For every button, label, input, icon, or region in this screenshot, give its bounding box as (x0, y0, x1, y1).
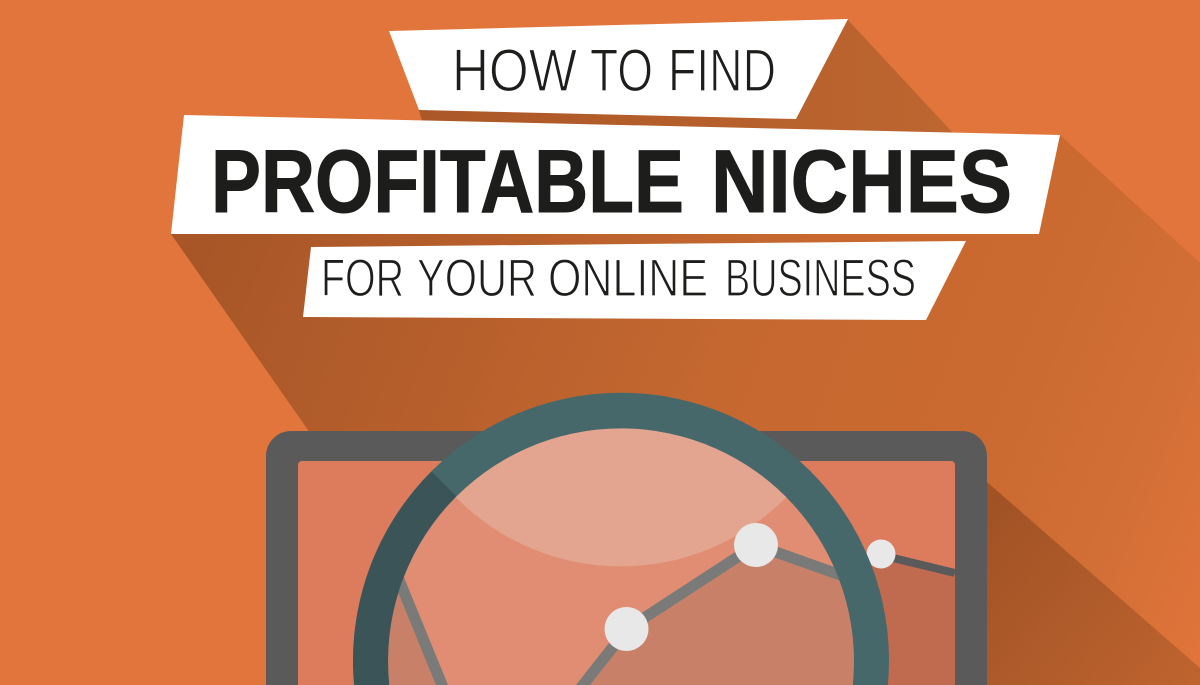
screen chart area (800, 540, 955, 685)
lens highlight (456, 428, 786, 566)
small chart point (866, 540, 896, 568)
lens ring (353, 393, 889, 685)
title banner: for your online business: BUSINESS (725, 249, 916, 308)
title banner: how to find: FIND (668, 37, 776, 104)
lens ring shaded part (353, 472, 456, 685)
lens glass (388, 428, 854, 685)
title banner: for your online business: ONLINE (548, 249, 708, 308)
magnified chart area (388, 558, 854, 685)
laptop frame (266, 431, 987, 685)
title banner: for your online business: YOUR (417, 249, 537, 308)
laptop screen (298, 461, 955, 685)
shadow of top banner (419, 20, 952, 140)
long shadow behind banners (171, 135, 1200, 685)
title banner: how to find: HOW (452, 37, 577, 104)
title banner: profitable niches (171, 115, 1060, 234)
title banner: how to find (389, 19, 848, 119)
magnified chart line: left segment (398, 577, 448, 685)
laptop shadow (987, 482, 1200, 685)
magnified chart point 2 (734, 523, 778, 567)
magnified chart line: rising segment (576, 642, 618, 685)
magnified chart line: upper segments (642, 546, 840, 622)
laptop (266, 431, 987, 685)
magnified chart point 1 (604, 607, 648, 651)
screen chart line (881, 555, 955, 573)
title banner: for your online business: FOR (321, 249, 404, 308)
title banner: for your online business (303, 241, 966, 320)
title banner: how to find: TO (590, 37, 653, 104)
title banner: profitable niches: NICHES (711, 131, 1012, 231)
magnifying glass (353, 393, 889, 685)
title banner: profitable niches: PROFITABLE (211, 131, 684, 231)
magnified chart (370, 523, 860, 685)
